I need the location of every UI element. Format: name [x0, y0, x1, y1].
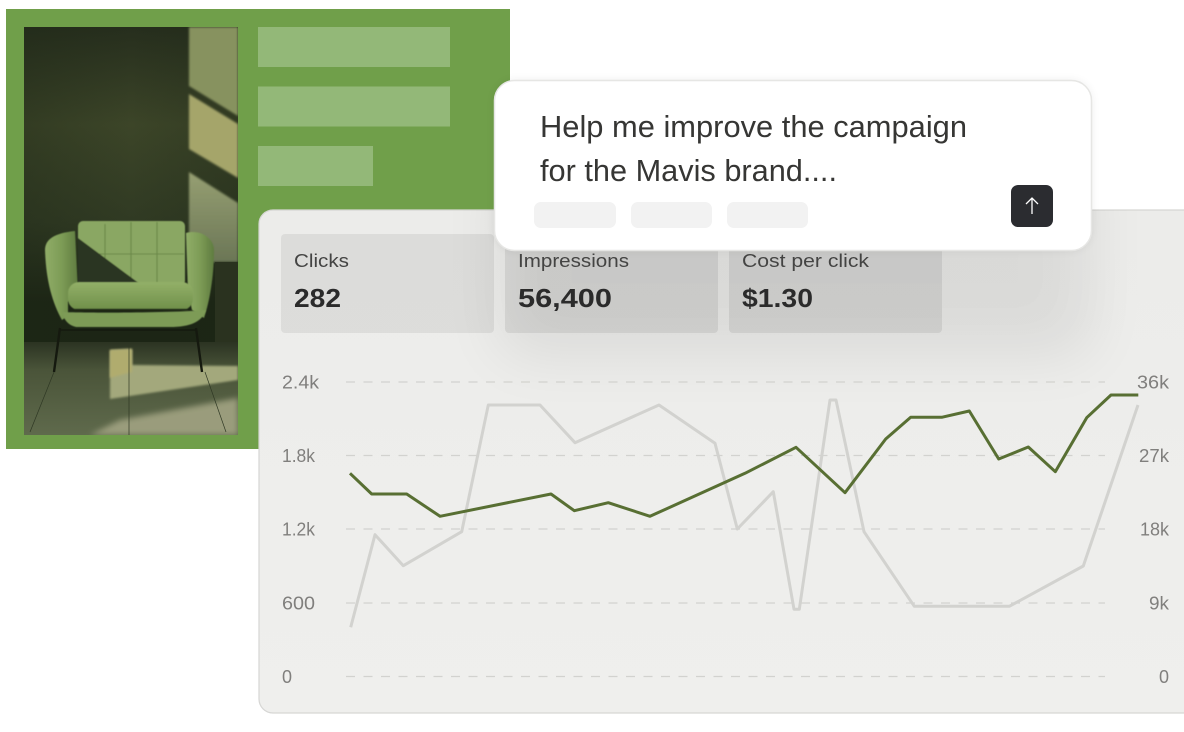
left axis labels: 1.8k: [282, 446, 316, 466]
metric: cost per click: [729, 234, 942, 333]
photo: green armchair in a sunlit room: [24, 27, 238, 435]
chair back: [78, 221, 185, 286]
left axis labels: 1.2k: [282, 520, 316, 540]
right axis labels: 18k: [1140, 520, 1170, 540]
right axis labels: 27k: [1139, 446, 1170, 466]
metric: cost per click: Cost per click: [742, 251, 870, 271]
panel: green ad creative: [6, 9, 510, 449]
metric: cost per click: $1.30: [742, 283, 813, 313]
panel: prompt callout: [494, 80, 1092, 250]
right axis labels: 9k: [1149, 594, 1170, 614]
prompt text: [540, 109, 967, 188]
panel: analytics dashboard card: [258, 209, 1184, 714]
suggestion chips: [534, 202, 808, 228]
series: gray line: [351, 400, 1138, 627]
left axis labels: 0: [282, 667, 292, 687]
metric: impressions: [505, 234, 718, 333]
left axis labels: 2.4k: [282, 372, 320, 392]
right axis labels: 0: [1159, 667, 1169, 687]
left axis labels: 600: [282, 594, 315, 614]
left axis labels: [282, 372, 320, 687]
metric: clicks: [281, 234, 494, 333]
chair seat: [62, 282, 206, 327]
series: green line: [350, 395, 1138, 516]
metric: impressions: 56,400: [518, 283, 612, 313]
line chart: dual axis clicks and impressions: [282, 372, 1170, 687]
prompt text: Help me improve the campaign: [540, 109, 967, 144]
right axis labels: [1137, 372, 1170, 687]
chair arms: [45, 231, 214, 320]
metric: clicks: 282: [294, 283, 341, 313]
icon: send arrow button: [1011, 185, 1053, 227]
prompt text: for the Mavis brand....: [540, 153, 837, 188]
metric: clicks: Clicks: [294, 251, 349, 271]
right axis labels: 36k: [1137, 372, 1170, 392]
metric: impressions: Impressions: [518, 251, 629, 271]
placeholder text bars: [258, 27, 450, 186]
